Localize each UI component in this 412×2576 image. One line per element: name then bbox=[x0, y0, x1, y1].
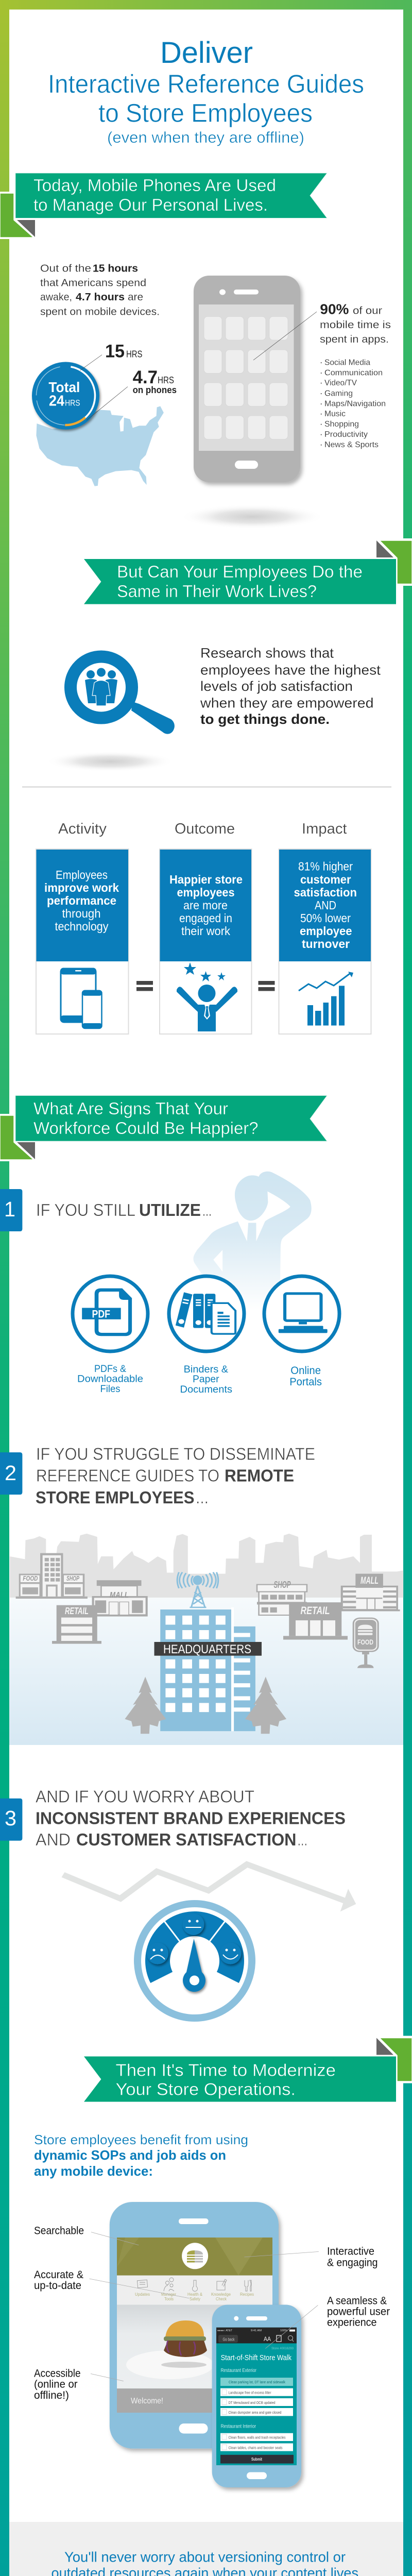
store signs: FOOD bbox=[23, 1574, 38, 1582]
heading: struggle to disseminate: REFERENCE GUIDES TO bbox=[36, 1466, 219, 1485]
illustration: city with headquarters: MALL bbox=[360, 1575, 379, 1586]
checklist content: Restaurant Interior bbox=[221, 2424, 256, 2430]
text: americans awake hours: 4.7 hours bbox=[76, 292, 125, 303]
panel: outcome: Happier store bbox=[169, 873, 243, 886]
equals sign bbox=[136, 981, 153, 991]
panel: impact: employee bbox=[300, 924, 352, 938]
stores bbox=[16, 1553, 400, 1668]
callout: seamless user experience: experience bbox=[327, 2317, 377, 2329]
heading: inconsistent brand experiences: AND IF YOU WORRY ABOUT bbox=[36, 1787, 254, 1806]
gauge needle bbox=[183, 1939, 205, 1992]
checklist content: Clean dumpster area and gate closed bbox=[229, 2410, 281, 2415]
label: binders and paper documents bbox=[180, 1364, 232, 1395]
panel: activity bbox=[36, 849, 129, 1034]
label: online portals: Portals bbox=[289, 1376, 322, 1388]
chart: 24 hours circle: 24 bbox=[49, 393, 64, 409]
text: store employees benefit bbox=[34, 2132, 248, 2179]
illustration: city with headquarters: RETAIL bbox=[301, 1605, 330, 1617]
callout: searchable: Searchable bbox=[34, 2225, 84, 2237]
column heading: outcome: Outcome bbox=[175, 821, 235, 837]
list of app categories: Maps/Navigation bbox=[324, 399, 386, 408]
panel: outcome: employees bbox=[177, 886, 235, 899]
checklist nav bar bbox=[217, 2329, 295, 2343]
list of app categories: · bbox=[320, 358, 322, 367]
ribbon fold: section two bbox=[376, 538, 412, 586]
heading: struggle to disseminate: STORE EMPLOYEES bbox=[36, 1488, 195, 1507]
title: (even when they are offline) bbox=[107, 128, 304, 146]
text: 90 percent in apps: mobile time is bbox=[320, 319, 391, 331]
ribbon fold: section four bbox=[376, 2036, 412, 2083]
number tab 3: 3 bbox=[5, 1806, 16, 1830]
app menu strip: Recipes bbox=[240, 2292, 254, 2297]
callout: accurate and up to date bbox=[34, 2269, 83, 2292]
number tab 2: 2 bbox=[5, 1461, 16, 1485]
headquarters building bbox=[125, 1572, 286, 1734]
checklist content: Restaurant Exterior bbox=[221, 2368, 257, 2374]
heading: if you still utilize: IF YOU STILL bbox=[36, 1200, 135, 1219]
ribbon: signs workforce could be happier: Workforce Could Be Happier? bbox=[33, 1118, 259, 1138]
chart: 24 hours circle: HRS bbox=[65, 398, 80, 408]
panel: outcome: engaged in bbox=[179, 911, 232, 925]
ribbon: today mobile phones bbox=[15, 173, 327, 218]
heading: inconsistent brand experiences: ... bbox=[298, 1830, 307, 1849]
icon: magnifying glass with people bbox=[71, 656, 175, 734]
title: Deliver bbox=[160, 36, 253, 70]
panel: outcome: their work bbox=[181, 924, 230, 938]
text: 90 percent in apps: of our bbox=[353, 305, 382, 316]
list of app categories: News & Sports bbox=[324, 440, 379, 449]
panel: administration benefits bbox=[9, 2522, 403, 2576]
app header bbox=[117, 2238, 272, 2276]
label: pdfs and downloadable files: Downloadable bbox=[77, 1374, 143, 1385]
text: americans awake hours: spent on mobile devices. bbox=[40, 306, 160, 317]
checklist content: Clean parking lot, DT lane and sidewalk bbox=[229, 2380, 285, 2384]
text: americans awake hours bbox=[40, 263, 160, 317]
heading: inconsistent brand experiences: INCONSISTENT BRAND EXPERIENCES bbox=[36, 1809, 346, 1828]
panel: impact: turnover bbox=[302, 937, 350, 951]
icon: grey phone with app grid bbox=[194, 276, 317, 482]
panel: activity: Employees bbox=[56, 868, 108, 882]
ribbon fold: section one bbox=[0, 192, 35, 239]
stat: 15 hours: HRS bbox=[126, 349, 142, 360]
illustration: city with headquarters bbox=[9, 1534, 403, 1745]
list of app categories: · bbox=[320, 420, 322, 429]
text: americans awake hours: awake, bbox=[40, 292, 72, 303]
label: pdfs and downloadable files: Files bbox=[100, 1384, 121, 1395]
callout: accurate and up to date: Accurate & bbox=[34, 2269, 83, 2281]
illustration: city with headquarters: FOOD bbox=[357, 1638, 373, 1646]
small phone showing store walk checklist bbox=[212, 2305, 301, 2487]
list of app categories: · bbox=[320, 410, 322, 418]
store signs: MALL bbox=[110, 1591, 129, 1600]
app menu strip: Knowledge bbox=[211, 2292, 231, 2297]
title bbox=[48, 36, 364, 146]
ribbon: can employees do the same: Same in Their Work Lives? bbox=[117, 582, 317, 601]
panel: activity: performance bbox=[47, 894, 116, 907]
panel intro text bbox=[52, 2549, 358, 2576]
checklist content: Start-of-Shift Store Walk bbox=[221, 2354, 292, 2362]
text: americans awake hours: Out of the bbox=[40, 263, 91, 274]
headquarters building: HEADQUARTERS bbox=[163, 1642, 251, 1656]
app menu strip: Updates bbox=[135, 2292, 150, 2297]
title: Interactive Reference Guides bbox=[48, 70, 364, 98]
text: research shows: levels of job satisfaction bbox=[200, 679, 353, 694]
stat: 4.7 hours on phones: on phones bbox=[133, 385, 177, 395]
column heading: activity: Activity bbox=[58, 821, 107, 837]
icon: phone and tablet bbox=[60, 968, 102, 1028]
text: 90 percent in apps: 90% bbox=[320, 301, 349, 317]
ribbon: today mobile phones: Today, Mobile Phones Are Used bbox=[33, 176, 276, 195]
ribbon: modernize store operations: Your Store Operations. bbox=[115, 2079, 296, 2099]
list of app categories: · bbox=[320, 440, 322, 449]
number tab 1: 1 bbox=[4, 1197, 15, 1221]
ribbon: modernize store operations: Then It's Time to Modernize bbox=[115, 2060, 336, 2079]
icon: rising bar chart bbox=[299, 972, 353, 1025]
number tab 1 bbox=[0, 1189, 22, 1231]
heading: inconsistent brand experiences: AND bbox=[36, 1830, 71, 1849]
app menu strip: Manager bbox=[161, 2292, 176, 2297]
app food photo bbox=[117, 2305, 272, 2413]
app menu strip: Health & bbox=[187, 2292, 202, 2297]
illustration: puzzled man silhouette bbox=[193, 1172, 312, 1311]
list of app categories: · bbox=[320, 399, 322, 408]
app menu strip bbox=[117, 2276, 272, 2305]
panel: impact: 81% higher bbox=[298, 859, 353, 873]
chart: 24 hours circle bbox=[24, 354, 128, 437]
list of app categories: Music bbox=[324, 410, 346, 418]
store signs: SHOP bbox=[66, 1574, 79, 1582]
list of app categories: · bbox=[320, 379, 322, 387]
checklist content: Clean floors, walls and trash receptacles bbox=[229, 2435, 286, 2440]
ribbon: can employees do the same: But Can Your Employees Do the bbox=[117, 562, 363, 581]
heading: struggle to disseminate: REMOTE bbox=[225, 1466, 294, 1485]
callout: interactive and engaging bbox=[327, 2246, 378, 2269]
panel: impact: 50% lower bbox=[300, 911, 351, 925]
text: 90 percent in apps: spent in apps. bbox=[320, 334, 389, 345]
heading: inconsistent brand experiences: CUSTOMER SATISFACTION bbox=[76, 1830, 297, 1849]
callout lines bbox=[89, 2232, 319, 2381]
callout: seamless user experience: powerful user bbox=[327, 2306, 390, 2318]
icon: satisfaction gauge bbox=[138, 1904, 252, 2018]
list of app categories: Shopping bbox=[324, 420, 359, 429]
list of app categories: Gaming bbox=[324, 389, 353, 398]
heading: if you still utilize bbox=[36, 1200, 212, 1219]
text: americans awake hours: that Americans spend bbox=[40, 277, 146, 289]
panel: outcome bbox=[160, 849, 251, 1034]
stat: 4.7 hours on phones: 4.7 bbox=[133, 367, 158, 387]
label: pdfs and downloadable files bbox=[77, 1364, 143, 1395]
title: to Store Employees bbox=[98, 99, 313, 128]
list of app categories: · bbox=[320, 430, 322, 439]
checklist nav bar: ●●●●○ AT&T bbox=[217, 2329, 232, 2332]
checklist content bbox=[220, 2347, 294, 2464]
panel: impact bbox=[279, 849, 371, 1034]
ribbon: modernize store operations bbox=[84, 2057, 396, 2102]
declining arrow bbox=[63, 1865, 356, 1911]
store signs bbox=[23, 1574, 291, 1600]
text: research shows: employees have the highest bbox=[200, 662, 381, 677]
large phone showing restaurant app bbox=[110, 2202, 279, 2449]
ribbon: signs workforce could be happier: What Are Signs That Your bbox=[33, 1099, 228, 1118]
callout: interactive and engaging: & engaging bbox=[327, 2257, 378, 2269]
magnifier shadow bbox=[46, 751, 175, 772]
text: americans awake hours: are bbox=[128, 292, 143, 303]
sad face bbox=[147, 1943, 168, 1964]
callout: interactive and engaging: Interactive bbox=[327, 2246, 374, 2258]
panel: impact: customer bbox=[300, 873, 351, 886]
panel: activity: technology bbox=[55, 920, 109, 933]
panel: outcome: are more bbox=[183, 899, 228, 912]
text: research shows: when they are empowered bbox=[200, 696, 374, 711]
ribbon: today mobile phones: to Manage Our Personal Lives. bbox=[33, 195, 268, 214]
text: store employees benefit: Store employees benefit from using bbox=[34, 2132, 248, 2147]
equals sign bbox=[259, 981, 275, 991]
app menu strip: Check bbox=[216, 2296, 227, 2301]
skyline bbox=[10, 1534, 403, 1598]
checklist nav bar: AA bbox=[264, 2335, 271, 2343]
callout: accessible online or offline bbox=[34, 2368, 80, 2401]
list of app categories: · bbox=[320, 389, 322, 398]
neutral face bbox=[182, 1913, 204, 1935]
list of app categories: Communication bbox=[324, 369, 383, 378]
callout: seamless user experience: A seamless & bbox=[327, 2295, 387, 2307]
app food photo: Welcome! bbox=[131, 2397, 163, 2405]
checklist nav bar: 100% bbox=[280, 2329, 288, 2332]
chart: 24 hours circle: Total bbox=[48, 379, 80, 395]
heading: struggle to disseminate: IF YOU STRUGGLE TO DISSEMINATE bbox=[36, 1445, 315, 1464]
stat: 15 hours bbox=[105, 342, 142, 362]
label: binders and paper documents: Paper bbox=[193, 1374, 219, 1385]
list of app categories bbox=[320, 358, 386, 449]
label: online portals bbox=[289, 1365, 322, 1388]
heading: if you still utilize: ... bbox=[202, 1200, 212, 1219]
checklist content: DT Menuboard and OCB updated bbox=[229, 2400, 275, 2405]
checklist content: Submit bbox=[251, 2457, 262, 2462]
icon: pdf file bbox=[73, 1276, 148, 1351]
map of the united states bbox=[36, 406, 164, 486]
text: store employees benefit: any mobile device: bbox=[34, 2163, 153, 2179]
label: binders and paper documents: Binders & bbox=[184, 1364, 228, 1375]
panel: impact: satisfaction bbox=[294, 886, 357, 899]
label: online portals: Online bbox=[290, 1365, 321, 1377]
ribbon: can employees do the same bbox=[84, 559, 396, 604]
panel intro text: You'll never worry about versioning control or bbox=[64, 2549, 346, 2565]
phone shadow on floor bbox=[180, 504, 324, 529]
list of app categories: Productivity bbox=[324, 430, 368, 439]
city ground bbox=[9, 1598, 403, 1745]
panel: impact: AND bbox=[315, 899, 336, 912]
stat: 4.7 hours on phones: HRS bbox=[158, 375, 174, 385]
label: binders and paper documents: Documents bbox=[180, 1384, 232, 1395]
illustration: city with headquarters: RETAIL bbox=[65, 1606, 89, 1616]
text: research shows: Research shows that bbox=[200, 646, 334, 661]
stat: 4.7 hours on phones bbox=[133, 367, 177, 395]
ribbon: signs workforce could be happier bbox=[15, 1095, 327, 1141]
app menu strip: Safety bbox=[190, 2296, 201, 2301]
text: research shows: to get things done. bbox=[200, 711, 330, 727]
heading: struggle to disseminate bbox=[36, 1445, 315, 1507]
callout: accurate and up to date: up-to-date bbox=[34, 2280, 81, 2292]
heading: inconsistent brand experiences bbox=[36, 1787, 346, 1849]
stat: 15 hours: 15 bbox=[105, 342, 125, 362]
text: store employees benefit: dynamic SOPs and job aids on bbox=[34, 2147, 226, 2163]
icon: pdf file: PDF bbox=[92, 1309, 110, 1320]
heading: if you still utilize: UTILIZE bbox=[139, 1200, 201, 1219]
icon: binders and paper bbox=[169, 1276, 244, 1351]
callout: seamless user experience bbox=[327, 2295, 390, 2329]
column heading: impact: Impact bbox=[302, 821, 347, 837]
number tab 2 bbox=[0, 1452, 22, 1495]
text: 90 percent in apps bbox=[320, 301, 391, 449]
list of app categories: Social Media bbox=[324, 358, 370, 367]
text: americans awake hours: 15 hours bbox=[93, 263, 138, 274]
happy face bbox=[219, 1943, 241, 1964]
callout: accessible online or offline: offline!) bbox=[34, 2389, 69, 2401]
list of app categories: Video/TV bbox=[324, 379, 357, 387]
number tab 3 bbox=[0, 1799, 22, 1841]
panel: activity: improve work bbox=[44, 881, 119, 894]
checklist nav bar: Go back bbox=[222, 2337, 235, 2342]
checklist content: Clean tables, chairs and booster seats bbox=[229, 2445, 283, 2450]
app menu strip: Tools bbox=[164, 2296, 174, 2301]
callout: accessible online or offline: Accessible bbox=[34, 2368, 80, 2380]
list of app categories: · bbox=[320, 369, 322, 378]
icon: online portal computer bbox=[264, 1276, 339, 1351]
callout: accessible online or offline: (online or bbox=[34, 2379, 77, 2391]
label: pdfs and downloadable files: PDFs & bbox=[94, 1364, 126, 1375]
ribbon fold: section three bbox=[0, 1114, 35, 1161]
icon: happy person with stars bbox=[177, 962, 237, 1031]
text: research shows bbox=[200, 646, 381, 727]
checklist nav bar: 9:41 AM bbox=[251, 2329, 262, 2332]
panel: activity: through bbox=[62, 907, 101, 920]
checklist content: Landscape free of excess litter bbox=[229, 2391, 271, 2395]
store signs: SHOP bbox=[274, 1580, 291, 1590]
checklist content: Store #0016293 bbox=[271, 2347, 294, 2350]
heading: struggle to disseminate: ... bbox=[196, 1488, 209, 1507]
